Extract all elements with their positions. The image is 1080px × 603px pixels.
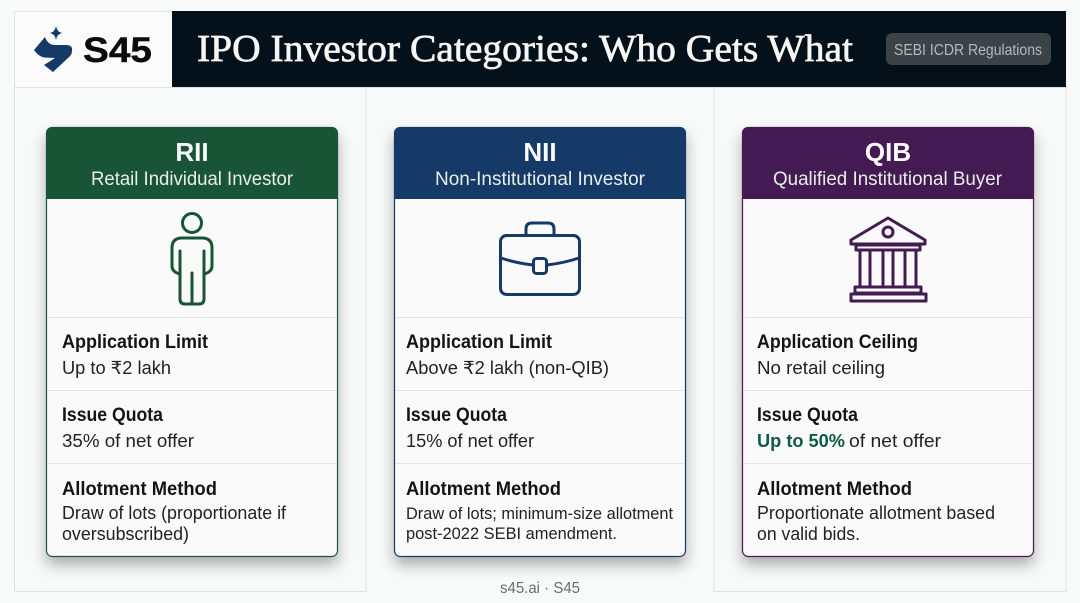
allotment method xyxy=(757,479,995,544)
title band xyxy=(172,11,1066,87)
allotment method: Allotment Method xyxy=(757,479,912,500)
QIB header xyxy=(742,127,1034,199)
logo: S45 xyxy=(15,12,172,87)
icon: briefcase xyxy=(500,223,580,294)
allotment method: Allotment Method xyxy=(62,479,217,500)
allotment method xyxy=(62,479,287,544)
allotment method: oversubscribed) xyxy=(62,524,189,544)
icon: bank building xyxy=(851,218,926,301)
title: IPO Investor Categories: Who Gets What xyxy=(197,28,853,70)
issue quota: Up to 50% xyxy=(757,431,845,451)
panel: QIB xyxy=(742,127,1034,556)
badge: regulation xyxy=(886,33,1051,65)
application limit xyxy=(406,332,609,378)
allotment method: post-2022 SEBI amendment. xyxy=(406,525,617,543)
application ceiling: No retail ceiling xyxy=(757,358,885,378)
allotment method: Allotment Method xyxy=(406,479,561,500)
panel: RII xyxy=(46,127,338,556)
panel: NII xyxy=(394,127,686,556)
application ceiling xyxy=(757,332,918,378)
issue quota: 35% of net offer xyxy=(62,431,194,451)
NII header: NII xyxy=(523,137,557,167)
NII header xyxy=(394,127,686,199)
application limit: Up to ₹2 lakh xyxy=(62,358,171,378)
allotment method xyxy=(406,479,673,543)
application limit: Above ₹2 lakh (non-QIB) xyxy=(406,358,609,378)
application limit xyxy=(62,332,209,378)
logo wordmark: S45 xyxy=(83,31,152,70)
header bar xyxy=(15,11,1066,87)
footer: s45.ai · S45 xyxy=(500,580,580,597)
allotment method: Draw of lots; minimum-size allotment xyxy=(406,505,673,523)
issue quota: Issue Quota xyxy=(62,405,163,426)
issue quota: Issue Quota xyxy=(406,405,507,426)
RII header xyxy=(46,127,338,199)
issue quota xyxy=(62,405,194,451)
issue quota xyxy=(757,405,941,451)
icon: S45 mark xyxy=(34,26,72,72)
QIB header: Qualified Institutional Buyer xyxy=(773,169,1003,190)
RII header: Retail Individual Investor xyxy=(91,169,294,190)
application limit: Application Limit xyxy=(406,332,553,353)
RII header: RII xyxy=(175,137,209,167)
NII header: Non-Institutional Investor xyxy=(435,169,646,190)
application ceiling: Application Ceiling xyxy=(757,332,918,353)
allotment method: Draw of lots (proportionate if xyxy=(62,503,287,523)
issue quota: 15% of net offer xyxy=(406,431,534,451)
allotment method: Proportionate allotment based xyxy=(757,503,995,523)
issue quota: of net offer xyxy=(849,431,941,451)
issue quota xyxy=(406,405,534,451)
allotment method: on valid bids. xyxy=(757,524,860,544)
application limit: Application Limit xyxy=(62,332,209,353)
QIB header: QIB xyxy=(865,137,911,167)
icon: person xyxy=(172,214,212,304)
badge: regulation: SEBI ICDR Regulations xyxy=(894,42,1042,59)
issue quota: Issue Quota xyxy=(757,405,858,426)
